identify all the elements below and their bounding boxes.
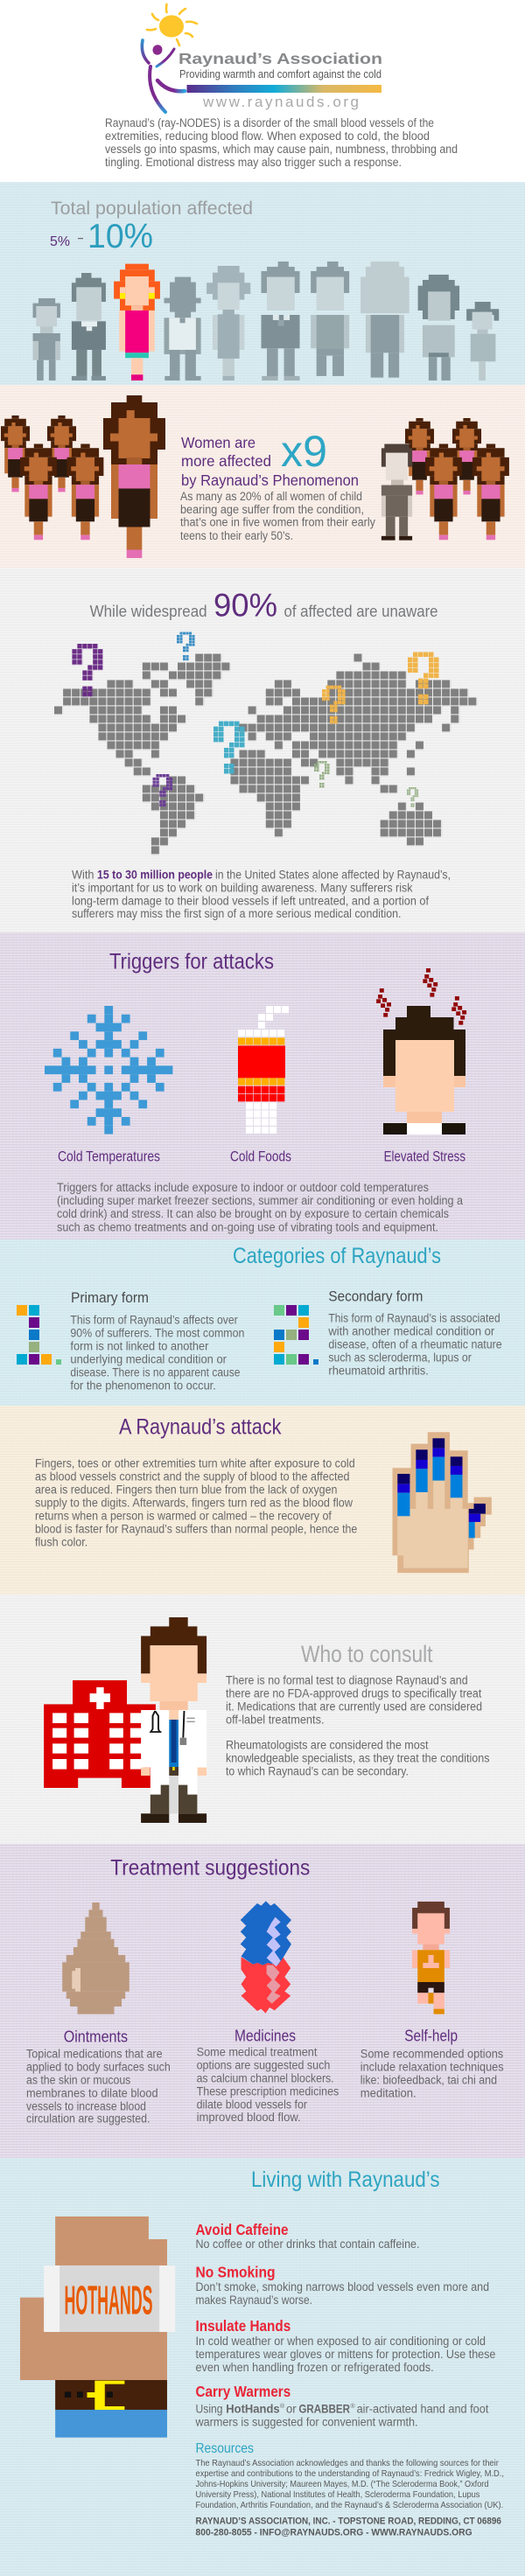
women text block [180, 490, 375, 542]
primary form text [70, 1313, 244, 1392]
secondary form text: rheumatoid arthritis. [328, 1365, 429, 1378]
tip: insulate hands: Insulate Hands [196, 2317, 290, 2335]
primary form text: This form of Raynaud’s affects over [70, 1313, 238, 1326]
pixel numeral 1 [17, 1305, 61, 1365]
figure: man in dark suit [72, 273, 106, 380]
ointments text: circulation are suggested. [26, 2112, 150, 2126]
heading: triggers for attacks: Triggers for attacks [109, 950, 274, 974]
tip: carry warmers: ® [280, 2403, 285, 2410]
women text block: bearing age suffer from the condition, [180, 503, 364, 516]
logo: Raynaud's Association [142, 4, 382, 112]
stress marks [376, 968, 466, 1025]
primary form text: for the phenomenon to occur. [70, 1379, 216, 1392]
gradient bar [187, 85, 382, 93]
primary form text: underlying medical condition or [70, 1352, 228, 1365]
awareness text block [72, 868, 451, 920]
stat: 5% - 10% [50, 218, 153, 255]
medicines text: improved blood flow. [197, 2111, 301, 2124]
logo name: Raynaud’s Association [178, 50, 382, 67]
intro text block [105, 116, 458, 169]
population pixel figures [33, 262, 499, 380]
ointments text: as the skin or mucous [26, 2073, 131, 2086]
icon: ointment drop [62, 1902, 130, 2014]
footer contact details [196, 2517, 501, 2538]
consult text block: There is no formal test to diagnose Raynaud’s and [226, 1673, 468, 1686]
attack text block [35, 1456, 357, 1548]
figure: highlighted red-haired woman [114, 264, 160, 380]
belt buckle [88, 2381, 124, 2410]
heading: 90% unaware: 90% [214, 587, 277, 623]
hospital building [44, 1680, 156, 1788]
figure: tall man with light head [360, 262, 410, 378]
triggers text block [57, 1181, 464, 1233]
attack text block: returns when a person is warmed or calmed – the recovery of [35, 1509, 332, 1522]
intro text block: Raynaud’s (ray-NODES) is a disorder of the small blood vessels of the [105, 116, 434, 129]
awareness text block: With [72, 868, 94, 882]
icon: dancing figure [142, 40, 185, 112]
fingertips [397, 1438, 486, 1538]
label: cold foods: Cold Foods [230, 1149, 291, 1165]
resources text block: The Raynaud’s Association acknowledges and thanks the following sources for their [196, 2459, 499, 2468]
medicines text: dilate blood vessels for [197, 2098, 307, 2112]
secondary form text: such as scleroderma, lupus or [328, 1351, 472, 1365]
triggers text block: cold drink) and stress. It can also be brought on by exposure to certain chemicals [57, 1207, 449, 1220]
resources text block [196, 2459, 504, 2510]
question marks on map [72, 632, 439, 807]
tip: carry warmers: warmers is suggested for convenient warmth. [195, 2415, 418, 2428]
intro text block: vessels go into spasms, which may cause pain, numbness, throbbing and [105, 143, 458, 156]
attack text block: Fingers, toes or other extremities turn white after exposure to cold [35, 1456, 355, 1470]
awareness text block: 15 to 30 million people [97, 868, 213, 882]
figure: woman with dark hair [164, 277, 201, 380]
consult text block: off-label treatments. [226, 1713, 324, 1726]
tip: carry warmers: ® [350, 2403, 355, 2410]
tip: carry warmers: Carry Warmers [196, 2383, 290, 2400]
attack text block: area is reduced. Fingers then turn blue from the lack of oxygen [35, 1483, 337, 1496]
secondary form text: This form of Raynaud’s is associated [328, 1311, 500, 1324]
icon: meditating person [412, 1902, 450, 2014]
tip: insulate hands [196, 2317, 495, 2374]
ointments text: applied to body surfaces such [26, 2060, 171, 2073]
awareness text block: long-term damage to their blood vessels if left untreated, and a portion of [72, 894, 429, 907]
stat: 5% - 10%: 5% [50, 234, 70, 249]
triggers text block: such as chemo treatments and on-going use of vibrating tools and equipment. [57, 1221, 438, 1233]
triggers text block: Triggers for attacks include exposure to indoor or outdoor cold temperatures [57, 1181, 429, 1194]
figure: small girl [466, 302, 499, 380]
footer contact details: 800-280-8055 - INFO@RAYNAUDS.ORG - WWW.RAYNAUDS.ORG [196, 2528, 472, 2538]
icon: sun [147, 4, 197, 45]
ointments text [26, 2047, 171, 2126]
heading: treatment suggestions: Treatment suggestions [110, 1855, 310, 1880]
heading: women are more affected: Women are [181, 434, 256, 451]
figure: boy [33, 298, 60, 380]
secondary form text: disease, often of a rheumatic nature [328, 1338, 502, 1351]
heading: women are more affected: by Raynaud’s Phenomenon [181, 471, 359, 489]
logo tagline: Providing warmth and comfort against the cold [179, 67, 382, 80]
women text block: that’s one in five women from their early [180, 516, 375, 529]
heading: 90% unaware [90, 587, 438, 623]
tip: carry warmers: GRABBER [298, 2402, 350, 2415]
attack text block: as blood vessels constrict and the supply of blood to the affected [35, 1470, 350, 1483]
medicines text: options are suggested such [197, 2059, 330, 2072]
primary form text: form is not linked to another [70, 1339, 209, 1352]
tip: carry warmers: Using [196, 2402, 222, 2415]
tip: avoid caffeine [196, 2221, 420, 2251]
primary form heading: Primary form [71, 1289, 149, 1306]
awareness text block: it’s important for us to work on building awareness. Many sufferers risk [72, 881, 413, 894]
heading: 90% unaware: of affected are unaware [284, 603, 438, 620]
self-help text: like: biofeedback, tai chi and [360, 2073, 497, 2086]
self-help text: include relaxation techniques [360, 2060, 504, 2073]
consult text block: to which Raynaud’s can be secondary. [226, 1764, 409, 1777]
figure: woman with short dark hair [418, 275, 459, 380]
icon: stressed face [376, 968, 466, 1134]
label: medicines: Medicines [234, 2027, 296, 2044]
attack text block: blood is faster for Raynaud’s suffers than normal people, hence the [35, 1522, 357, 1535]
heading: women are more affected: more affected [181, 452, 271, 470]
hand warmer packet [44, 2265, 175, 2332]
self-help text [360, 2047, 504, 2099]
heading: women are more affected [181, 434, 359, 489]
tip: insulate hands: even when handling frozen or refrigerated foods. [196, 2361, 434, 2374]
stat: x9: x9 [281, 427, 327, 476]
group of women (left) [1, 395, 165, 558]
icon: capsule [241, 1901, 291, 2014]
tip: no smoking: makes Raynaud’s worse. [196, 2293, 312, 2307]
secondary form text [327, 1311, 502, 1378]
tip: carry warmers: or [286, 2402, 297, 2415]
awareness text block: in the United States alone affected by Raynaud’s, [215, 868, 451, 882]
secondary form text: with another medical condition or [327, 1325, 495, 1338]
resources text block: Johns-Hopkins University; Maureen Mayes, M.D. (“The Scleroderma Book,” Oxford [196, 2480, 489, 2489]
intro text block: tingling. Emotional distress may also trigger such a response. [105, 156, 402, 169]
figure: man in grey shirt [311, 262, 349, 376]
tip: avoid caffeine: No coffee or other drinks that contain caffeine. [196, 2237, 420, 2251]
text: HOTHANDS [65, 2278, 152, 2323]
heading: resources: Resources [196, 2441, 254, 2456]
label: self-help: Self-help [404, 2027, 458, 2044]
stat: 5% - 10%: 10% [88, 218, 153, 255]
label: cold temperatures: Cold Temperatures [58, 1149, 160, 1165]
medicines text: Some medical treatment [197, 2046, 318, 2059]
consult text block: knowledgeable specialists, as they treat the conditions [226, 1751, 490, 1764]
doctor figure [141, 1617, 206, 1823]
consult text block: it. Medications that are currently used are considered [226, 1700, 482, 1713]
medicines text: as calcium channel blockers. [197, 2072, 334, 2085]
heading: who to consult: Who to consult [301, 1641, 433, 1667]
triggers text block: (including super market freezer sections, summer air conditioning or even holding a [57, 1194, 464, 1207]
self-help text: meditation. [360, 2086, 416, 2099]
heading: living with Raynaud's: Living with Raynaud’s [251, 2168, 439, 2192]
ointments text: membranes to dilate blood [26, 2086, 158, 2099]
secondary form heading: Secondary form [328, 1288, 423, 1304]
women text block: teens to their early 50’s. [180, 529, 293, 542]
consult text block [226, 1673, 490, 1777]
tip: avoid caffeine: Avoid Caffeine [196, 2221, 289, 2238]
label: ointments: Ointments [64, 2028, 128, 2045]
consult text block: there are no FDA-approved drugs to specifically treat [226, 1686, 482, 1700]
heading: a Raynaud's attack: A Raynaud’s attack [119, 1414, 282, 1439]
attack text block: flush color. [35, 1535, 88, 1548]
attack text block: supply to the digits. Afterwards, fingers turn red as the blood flow [35, 1496, 353, 1509]
intro text block: extremities, reducing blood flow. When exposed to cold, the blood [105, 129, 430, 143]
logo website: www.raynauds.org [202, 94, 359, 110]
tip: carry warmers: HotHands [226, 2402, 280, 2415]
stethoscope [150, 1711, 184, 1738]
tip: insulate hands: temperatures wear gloves or mittens for protection. Use these [196, 2348, 495, 2361]
medicines text [197, 2046, 340, 2124]
consult text block: Rheumatologists are considered the most [226, 1738, 429, 1751]
heading: categories of Raynaud's: Categories of Raynaud’s [233, 1244, 441, 1268]
icon: cold drink [238, 1006, 289, 1134]
tip: insulate hands: In cold weather or when exposed to air conditioning or cold [196, 2335, 486, 2348]
resources text block: University Press), National Institutes of Health, Scleroderma Foundation, Lupus [196, 2490, 480, 2500]
tip: no smoking: No Smoking [196, 2263, 276, 2280]
figure: woman in light dress [206, 266, 250, 380]
women text block: As many as 20% of all women of child [180, 490, 362, 503]
ointments text: vessels to increase blood [26, 2099, 146, 2112]
pixel numeral 2 [274, 1305, 318, 1365]
figure: man [382, 444, 412, 541]
primary form text: 90% of sufferers. The most common [70, 1326, 244, 1339]
tip: no smoking [196, 2263, 489, 2307]
label: elevated stress: Elevated Stress [384, 1149, 466, 1165]
heading: total population affected: Total population affected [51, 198, 253, 219]
illustration: hand warmer in pocket [20, 2216, 175, 2438]
tip: carry warmers [195, 2383, 489, 2428]
icon: hand with blue fingertips [393, 1432, 492, 1573]
self-help text: Some recommended options [360, 2047, 503, 2060]
group of women with a man (right) [382, 418, 509, 541]
drop highlight [72, 1968, 80, 1992]
medicines text: These prescription medicines [197, 2085, 340, 2098]
awareness text block: sufferers may miss the first sign of a more serious medical condition. [72, 907, 401, 920]
figure: man with collar [262, 262, 300, 380]
world map [54, 653, 477, 855]
tip: carry warmers: air-activated hand and foot [357, 2402, 489, 2415]
icon: snowflake [45, 1006, 172, 1134]
heading: 90% unaware: While widespread [90, 603, 207, 620]
tip: no smoking: Don’t smoke, smoking narrows blood vessels even more and [196, 2280, 489, 2293]
ointments text: Topical medications that are [26, 2047, 163, 2060]
primary form text: disease. There is no apparent cause [70, 1365, 240, 1379]
